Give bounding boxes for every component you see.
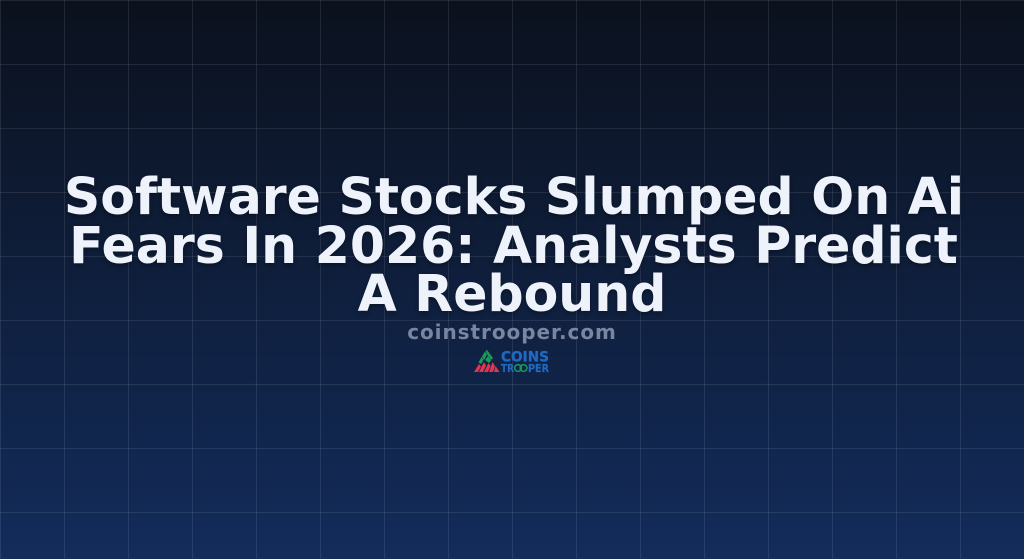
title bbox=[64, 167, 964, 323]
title: Software Stocks Slumped On Ai bbox=[64, 167, 964, 226]
title: A Rebound bbox=[358, 264, 666, 323]
logo wordmark: COINS bbox=[501, 350, 549, 366]
icon: green and red chart peaks bbox=[474, 350, 500, 372]
logo: coins trooper bbox=[474, 350, 549, 374]
title: Fears In 2026: Analysts Predict bbox=[69, 216, 958, 274]
logo wordmark bbox=[501, 350, 549, 375]
website domain: coinstrooper.com bbox=[407, 320, 617, 344]
